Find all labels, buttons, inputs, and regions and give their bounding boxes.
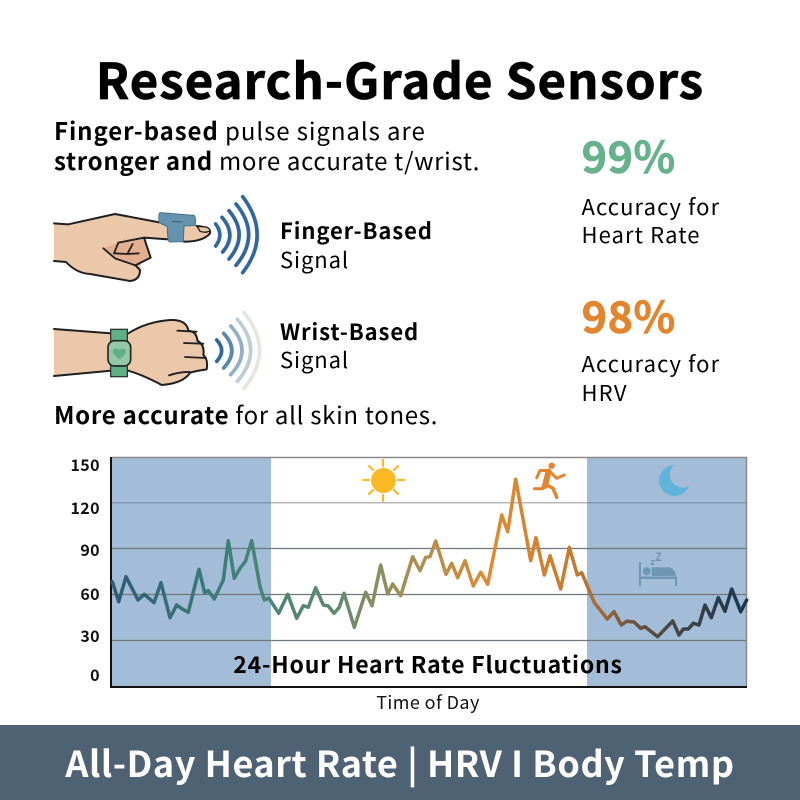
99 percent: 99% (582, 123, 676, 186)
y axis labels: 90 (80, 537, 100, 561)
intro text (54, 112, 480, 177)
wrist-based label (280, 315, 419, 375)
x axis label: Time of Day (376, 689, 480, 715)
icon: runner (534, 462, 564, 497)
icon: finger with ring sensor and strong signal (53, 194, 260, 282)
skin tones note: More accurate for all skin tones. (54, 396, 438, 431)
intro text: stronger and more accurate t/wrist. (54, 142, 480, 177)
y axis labels: 30 (80, 623, 100, 647)
finger-based label: Signal (280, 243, 349, 275)
chart title: 24-Hour Heart Rate Fluctuations (233, 646, 623, 680)
icon: moon (659, 465, 689, 496)
y axis labels: 150 (70, 452, 100, 476)
finger-based label (280, 214, 433, 275)
heart rate caption: Heart Rate (582, 218, 701, 250)
heart rate caption: Accuracy for (582, 190, 720, 222)
footer banner (0, 725, 800, 800)
icon: wrist with watch and weak signal (53, 310, 262, 390)
heart rate line (112, 479, 747, 637)
footer text: All-Day Heart Rate | HRV I Body Temp (65, 736, 735, 788)
HRV caption: HRV (582, 376, 628, 408)
icon: sleeping in bed: z (650, 555, 655, 568)
icon: sleeping in bed (639, 549, 677, 586)
y axis labels (70, 452, 100, 686)
wrist-based label: Wrist-Based (280, 315, 419, 347)
intro text: Finger-based pulse signals are (54, 112, 426, 147)
y axis labels: 60 (80, 581, 100, 605)
HRV caption: Accuracy for (582, 347, 720, 379)
title: Research-Grade Sensors (96, 43, 704, 114)
y axis labels: 0 (90, 662, 100, 686)
finger-based label: Finger-Based (280, 214, 433, 246)
98 percent: 98% (582, 283, 676, 346)
stat: heart rate accuracy (582, 123, 720, 250)
heart rate caption (582, 190, 720, 250)
y axis labels: 120 (70, 495, 100, 519)
line chart: 24-hour heart rate (70, 452, 748, 715)
HRV caption (582, 347, 720, 408)
icon: sleeping in bed: Z (655, 549, 662, 565)
icon: sun (363, 460, 404, 501)
stat: HRV accuracy (582, 283, 720, 408)
wrist-based label: Signal (280, 343, 349, 375)
